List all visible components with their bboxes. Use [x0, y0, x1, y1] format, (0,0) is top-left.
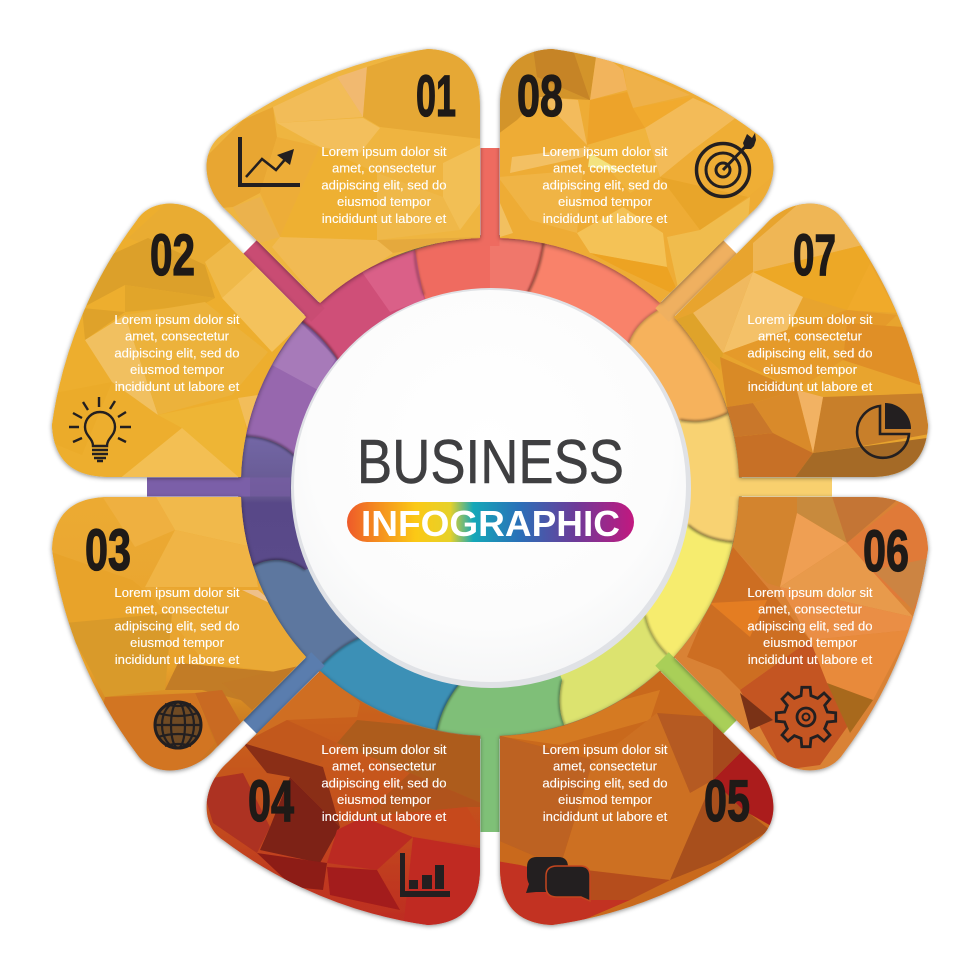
- icon: bar chart: [400, 853, 450, 897]
- icon: pie chart: [857, 403, 911, 458]
- panel: petal 06: [670, 490, 935, 780]
- text block 01: incididunt ut labore et: [322, 211, 447, 226]
- text block 05: amet, consectetur: [553, 759, 658, 774]
- text block 05: adipiscing elit, sed do: [542, 775, 668, 790]
- panel: petal 02: [45, 195, 310, 480]
- title: BUSINESS: BUSINESS: [357, 428, 624, 497]
- text block 03: adipiscing elit, sed do: [114, 618, 240, 633]
- text block 01: Lorem ipsum dolor sit: [321, 144, 447, 159]
- number 01: 01: [416, 64, 456, 129]
- text block 06: incididunt ut labore et: [748, 652, 873, 667]
- number 04: 04: [248, 769, 294, 834]
- text block 07: incididunt ut labore et: [748, 379, 873, 394]
- connector bars: [147, 148, 832, 832]
- text block 02: amet, consectetur: [125, 329, 230, 344]
- text block 03: [114, 585, 240, 667]
- text block 06: amet, consectetur: [758, 602, 863, 617]
- text block 04: Lorem ipsum dolor sit: [321, 742, 447, 757]
- number 03: 03: [85, 518, 131, 583]
- badge: INFOGRAPHIC: INFOGRAPHIC: [361, 503, 620, 544]
- text block 05: [542, 742, 668, 824]
- text block 02: adipiscing elit, sed do: [114, 345, 240, 360]
- text block 08: eiusmod tempor: [558, 194, 653, 209]
- text block 02: eiusmod tempor: [130, 362, 225, 377]
- centre disc: [291, 288, 691, 688]
- text block 04: amet, consectetur: [332, 759, 437, 774]
- number 06: 06: [863, 519, 909, 584]
- text block 07: [747, 312, 873, 394]
- icon: globe: [155, 702, 201, 748]
- text block 02: [114, 312, 240, 394]
- text block 01: eiusmod tempor: [337, 194, 432, 209]
- panel: petal 07: [670, 200, 935, 480]
- text block 03: Lorem ipsum dolor sit: [114, 585, 240, 600]
- text block 02: Lorem ipsum dolor sit: [114, 312, 240, 327]
- text block 03: amet, consectetur: [125, 602, 230, 617]
- text block 06: adipiscing elit, sed do: [747, 618, 873, 633]
- icon: gear: [776, 687, 836, 747]
- text block 08: Lorem ipsum dolor sit: [542, 144, 668, 159]
- text block 04: [321, 742, 447, 824]
- text block 05: eiusmod tempor: [558, 792, 653, 807]
- text block 01: adipiscing elit, sed do: [321, 177, 447, 192]
- icon: speech bubbles: [526, 857, 590, 901]
- text block 05: incididunt ut labore et: [543, 809, 668, 824]
- panel: petal 03: [45, 490, 315, 785]
- number 07: 07: [793, 223, 836, 288]
- text block 07: eiusmod tempor: [763, 362, 858, 377]
- text block 08: adipiscing elit, sed do: [542, 177, 668, 192]
- number 05: 05: [704, 769, 750, 834]
- text block 05: Lorem ipsum dolor sit: [542, 742, 668, 757]
- text block 01: [321, 144, 447, 226]
- text block 07: adipiscing elit, sed do: [747, 345, 873, 360]
- colour ring segments: [238, 235, 742, 739]
- panel: petal 04: [200, 660, 490, 930]
- text block 08: incididunt ut labore et: [543, 211, 668, 226]
- text block 06: eiusmod tempor: [763, 635, 858, 650]
- panel: petal 05: [496, 670, 776, 929]
- text block 04: adipiscing elit, sed do: [321, 775, 447, 790]
- panel: petal 01: [200, 40, 490, 310]
- text block 04: eiusmod tempor: [337, 792, 432, 807]
- text block 08: [542, 144, 668, 226]
- number 02: 02: [150, 223, 195, 288]
- text block 02: incididunt ut labore et: [115, 379, 240, 394]
- text block 06: [747, 585, 873, 667]
- icon: line chart: [240, 137, 300, 185]
- icon: light bulb: [69, 397, 131, 461]
- text block 07: amet, consectetur: [758, 329, 863, 344]
- icon: target: [696, 133, 756, 196]
- text block 03: incididunt ut labore et: [115, 652, 240, 667]
- panel: petal 08: [496, 46, 776, 306]
- text block 01: amet, consectetur: [332, 161, 437, 176]
- text block 06: Lorem ipsum dolor sit: [747, 585, 873, 600]
- text block 03: eiusmod tempor: [130, 635, 225, 650]
- text block 08: amet, consectetur: [553, 161, 658, 176]
- text block 04: incididunt ut labore et: [322, 809, 447, 824]
- number 08: 08: [517, 64, 563, 129]
- text block 07: Lorem ipsum dolor sit: [747, 312, 873, 327]
